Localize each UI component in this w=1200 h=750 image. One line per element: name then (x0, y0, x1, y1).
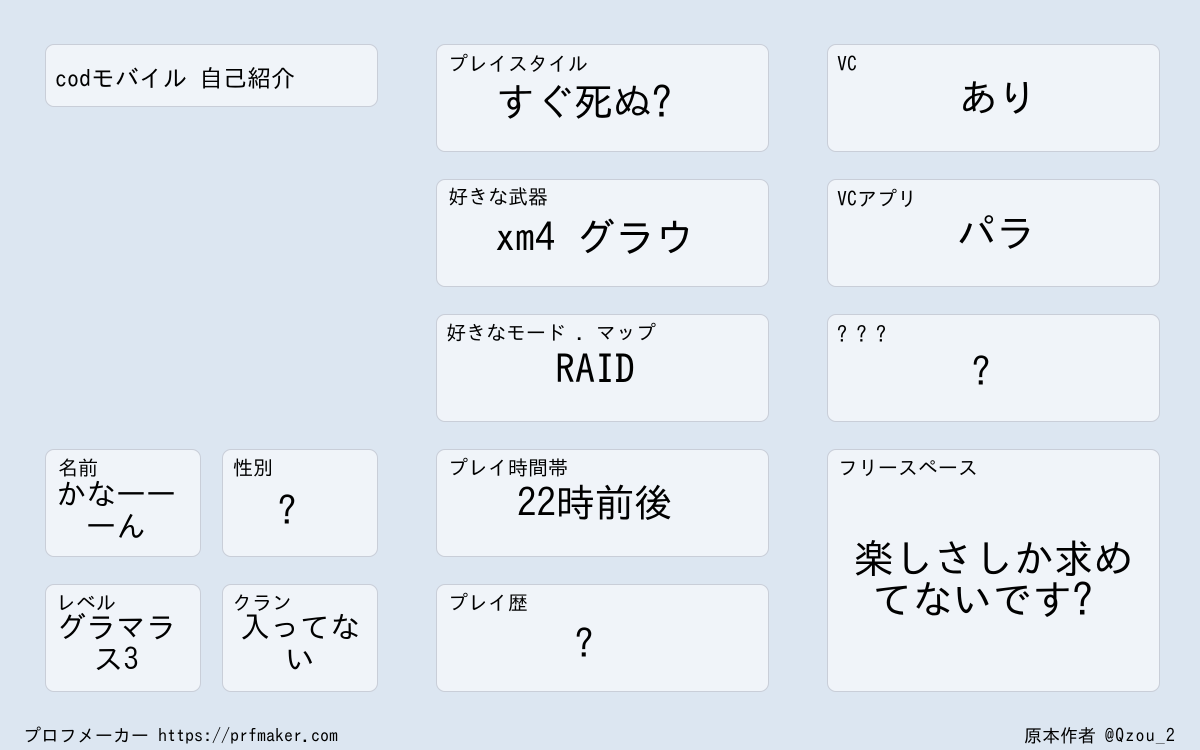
value: gender: ? (278, 492, 296, 528)
panel: level (45, 584, 201, 692)
footer: site credit: プロフメーカー https://prfmaker.com (23, 727, 338, 745)
panel: play style (436, 44, 769, 152)
panel: title (45, 44, 378, 107)
panel: favorite weapon (436, 179, 769, 287)
panel: name (45, 449, 201, 557)
title text: codモバイル 自己紹介 (55, 66, 295, 90)
panel: gender (222, 449, 378, 557)
value: voice chat: あり (959, 78, 1037, 117)
panel: play time (436, 449, 769, 557)
value: play style: すぐ死ぬ? (496, 82, 672, 121)
value: free space: 楽しさしか求め (854, 538, 1134, 578)
value: voice chat app: パラ (957, 213, 1035, 252)
value: name (56, 479, 176, 541)
label: voice chat app: VCアプリ (837, 189, 917, 209)
value: favorite weapon: xm4 グラウ (495, 217, 695, 257)
footer: author credit: 原本作者 @Qzou_2 (1024, 727, 1176, 745)
value: mystery: ? (972, 353, 990, 389)
value: name: ―ん (86, 511, 146, 541)
panel: voice chat app (827, 179, 1160, 287)
label: play history: プレイ歴 (448, 593, 528, 613)
value: play history: ? (575, 625, 593, 661)
label: favorite weapon: 好きな武器 (448, 187, 548, 207)
value: play time: 22時前後 (517, 483, 673, 522)
value: favorite mode and map: RAID (555, 349, 635, 389)
label: clan: クラン (232, 593, 292, 613)
label: voice chat: VC (837, 54, 857, 74)
panel: free space (827, 449, 1160, 692)
label: name: 名前 (58, 458, 98, 478)
value: clan: い (285, 644, 315, 674)
label: free space: フリースペース (838, 458, 978, 478)
panel: favorite mode and map (436, 314, 769, 422)
panel: mystery (827, 314, 1160, 422)
label: favorite mode and map: 好きなモード . マップ (446, 323, 656, 343)
value: name: かな―― (56, 479, 176, 509)
panel: clan (222, 584, 378, 692)
value: level: ス3 (94, 644, 138, 674)
label: level: レベル (56, 593, 116, 613)
label: mystery: ??? (837, 324, 896, 344)
label: gender: 性別 (233, 458, 273, 478)
label: play style: プレイスタイル (448, 54, 588, 74)
panel: play history (436, 584, 769, 692)
value: level: グラマラ (56, 612, 176, 642)
value: free space: てないです? (872, 579, 1092, 619)
value: clan (240, 612, 360, 674)
panel: voice chat (827, 44, 1160, 152)
value: level (56, 612, 176, 674)
value: clan: 入ってな (240, 612, 360, 642)
label: play time: プレイ時間帯 (448, 458, 568, 478)
value: free space (854, 538, 1134, 619)
